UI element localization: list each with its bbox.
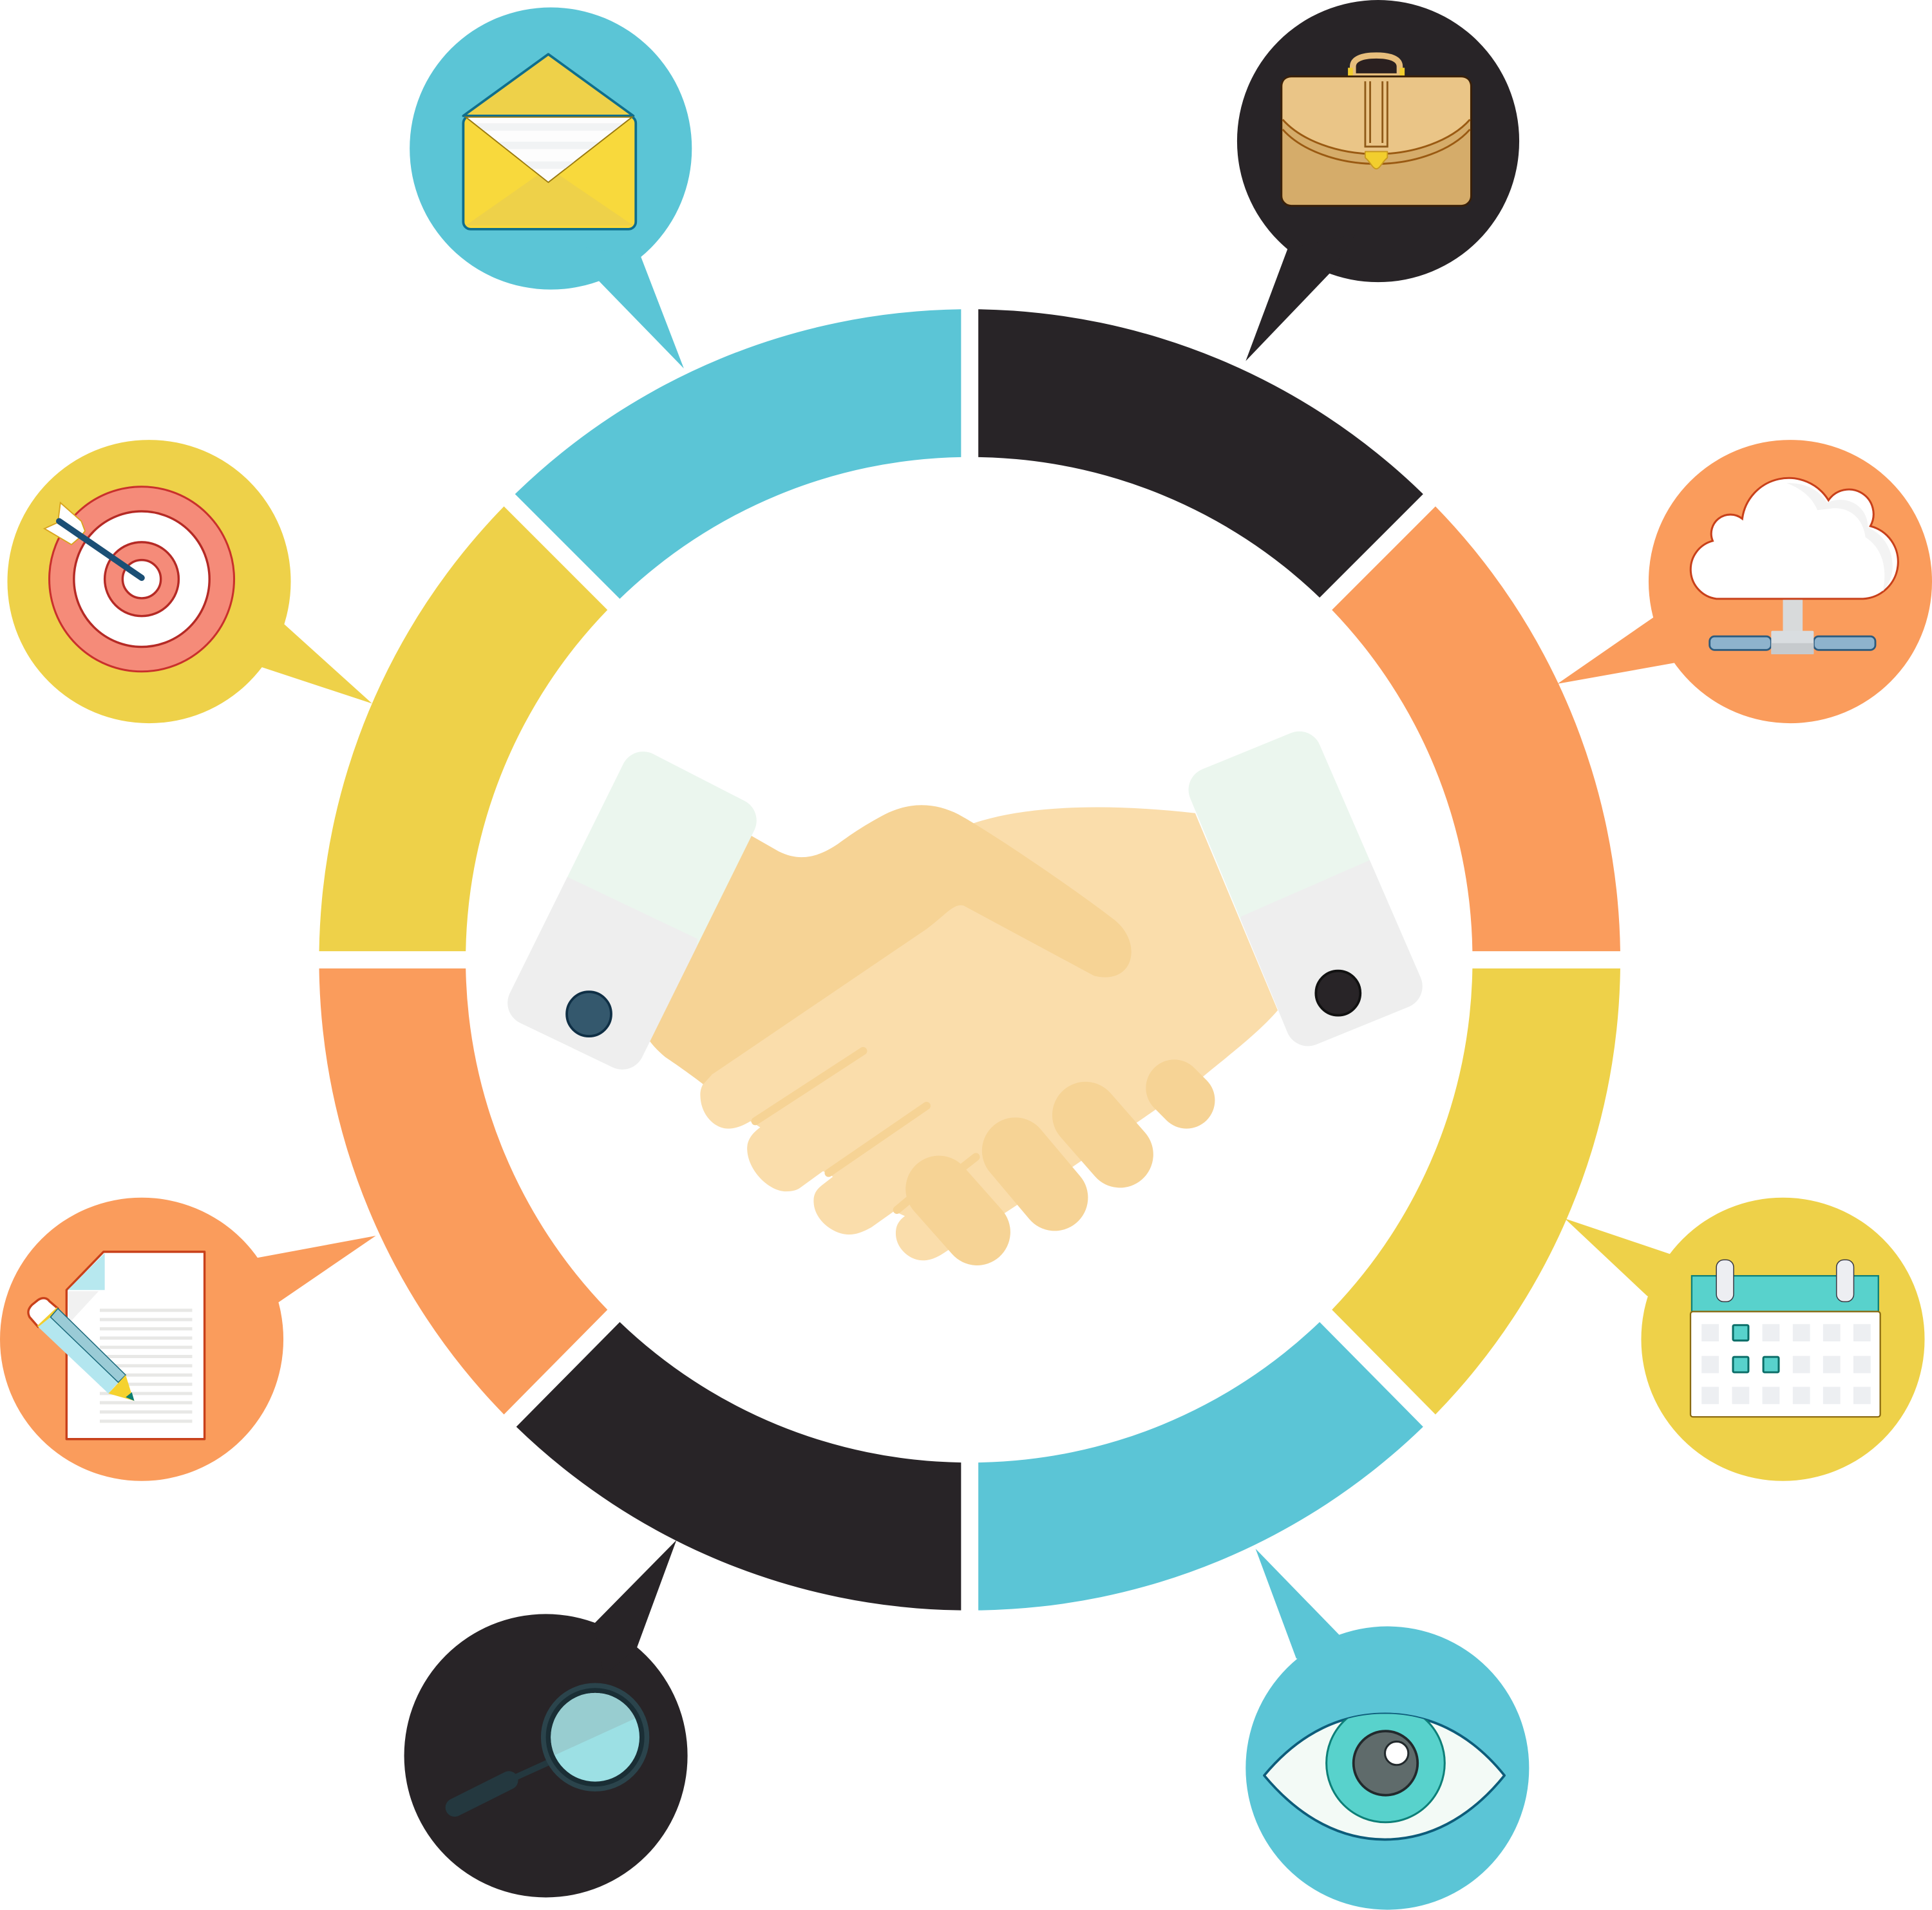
network stem <box>1783 599 1803 632</box>
dark hand fingers <box>939 1115 1120 1232</box>
pencil point <box>126 1392 135 1401</box>
bubble tail <box>234 623 372 704</box>
flap seams <box>1283 120 1470 164</box>
bubble tail <box>234 1236 376 1318</box>
speech bubble: blue eye <box>1245 1549 1529 1910</box>
bubble circle <box>1237 0 1519 282</box>
network bar left <box>1710 636 1771 650</box>
briefcase buckle <box>1365 151 1387 169</box>
pupil <box>1354 1731 1417 1795</box>
calendar page <box>1690 1312 1880 1417</box>
briefcase flap <box>1283 78 1470 154</box>
target bullseye <box>122 560 161 598</box>
ring segment: yellow left <box>319 506 607 951</box>
bubble tail <box>1565 1218 1688 1296</box>
bubble circle <box>410 8 692 290</box>
bubble tail <box>1256 1549 1356 1676</box>
bubble circle <box>1641 1198 1925 1481</box>
calendar day cells <box>1701 1324 1871 1404</box>
pencil band <box>38 1309 58 1327</box>
speech bubble: blue envelope <box>410 8 692 368</box>
light hand with fingers <box>700 808 1278 1260</box>
eye white <box>1264 1714 1504 1840</box>
right cuff <box>1211 753 1400 1024</box>
speech bubble: yellow calendar <box>1565 1198 1925 1481</box>
target outer ring <box>50 487 234 672</box>
pupil highlight <box>1385 1741 1408 1765</box>
ring segment: orange left <box>319 969 607 1414</box>
letter lines <box>466 127 633 165</box>
pencil eraser <box>28 1298 58 1327</box>
bubble circle <box>0 1198 283 1481</box>
calendar ring left <box>1716 1260 1734 1301</box>
icon: target with arrow <box>44 487 234 672</box>
envelope front fold <box>466 167 633 225</box>
ring segment: orange right <box>1332 506 1620 951</box>
icon: briefcase <box>1282 55 1471 206</box>
ring segment: blue bottom right <box>978 1322 1423 1611</box>
pencil body dark <box>50 1309 126 1383</box>
network bar right <box>1814 636 1875 650</box>
document text lines <box>100 1310 192 1421</box>
icon: calendar <box>1690 1260 1880 1417</box>
bubble tail <box>594 1540 676 1676</box>
finger creases <box>755 1051 976 1210</box>
magnifier stem <box>509 1762 549 1781</box>
right cuff grey part <box>1262 862 1418 1037</box>
ring segment: black bottom left <box>516 1322 961 1611</box>
target inner ring <box>105 542 178 616</box>
envelope body <box>463 116 636 229</box>
arrow shaft <box>59 521 142 578</box>
left cuff light part <box>530 774 734 1047</box>
cloud <box>1690 478 1898 599</box>
arrow fletching <box>44 503 85 545</box>
briefcase strap <box>1365 81 1387 147</box>
left cuff <box>530 774 734 1047</box>
network connector <box>1771 631 1814 654</box>
segmented ring <box>319 309 1620 1611</box>
ring segment: blue top left <box>515 309 961 599</box>
connector shadow <box>1771 643 1814 654</box>
ring segment: black top right <box>978 309 1423 598</box>
pencil body light <box>38 1317 118 1394</box>
bubble circle <box>7 440 291 723</box>
speech bubble: black magnifier <box>404 1540 688 1897</box>
speech bubble: orange cloud <box>1557 440 1932 723</box>
lens shade <box>551 1692 635 1755</box>
ring segment: yellow bottom right <box>1332 969 1620 1414</box>
icon: eye <box>1264 1704 1504 1840</box>
magnifier frame <box>544 1685 647 1789</box>
icon: cloud network <box>1690 478 1898 654</box>
bubble circle <box>1245 1627 1529 1910</box>
magnifier handle <box>455 1781 509 1808</box>
envelope back flap <box>463 54 633 116</box>
briefcase handle <box>1353 55 1399 77</box>
target white ring <box>74 511 209 647</box>
calendar ring right <box>1837 1260 1854 1301</box>
icon: envelope <box>463 54 636 229</box>
page fold <box>68 1253 105 1290</box>
speech bubble: yellow target <box>7 440 372 723</box>
bubble circle <box>1649 440 1932 723</box>
left cuff button <box>567 992 611 1036</box>
cloud shading <box>1786 483 1893 591</box>
icon: document with pencil <box>28 1252 205 1439</box>
bubble tail <box>579 247 684 368</box>
calendar header <box>1692 1276 1879 1312</box>
bubble circle <box>404 1614 688 1897</box>
icon: handshake <box>530 753 1400 1260</box>
icon: magnifying glass <box>455 1682 647 1808</box>
fold shadow <box>68 1291 99 1323</box>
handle clips <box>1350 68 1402 78</box>
pencil tip <box>108 1375 135 1401</box>
left cuff grey part <box>510 889 697 1069</box>
iris <box>1327 1704 1444 1822</box>
speech bubble: orange document <box>0 1198 376 1481</box>
bubble tail <box>1557 618 1700 684</box>
right cuff button <box>1316 971 1360 1016</box>
document page <box>66 1252 205 1439</box>
dark hand little finger <box>1174 1088 1186 1101</box>
bubble tail <box>1245 234 1356 361</box>
magnifier lens <box>551 1693 639 1782</box>
letter <box>466 117 632 182</box>
dark hand with thumb <box>646 805 1132 1084</box>
briefcase body <box>1282 77 1471 206</box>
highlighted day cells <box>1733 1325 1779 1372</box>
right cuff light part <box>1211 753 1400 1024</box>
speech bubble: black briefcase <box>1237 0 1519 361</box>
